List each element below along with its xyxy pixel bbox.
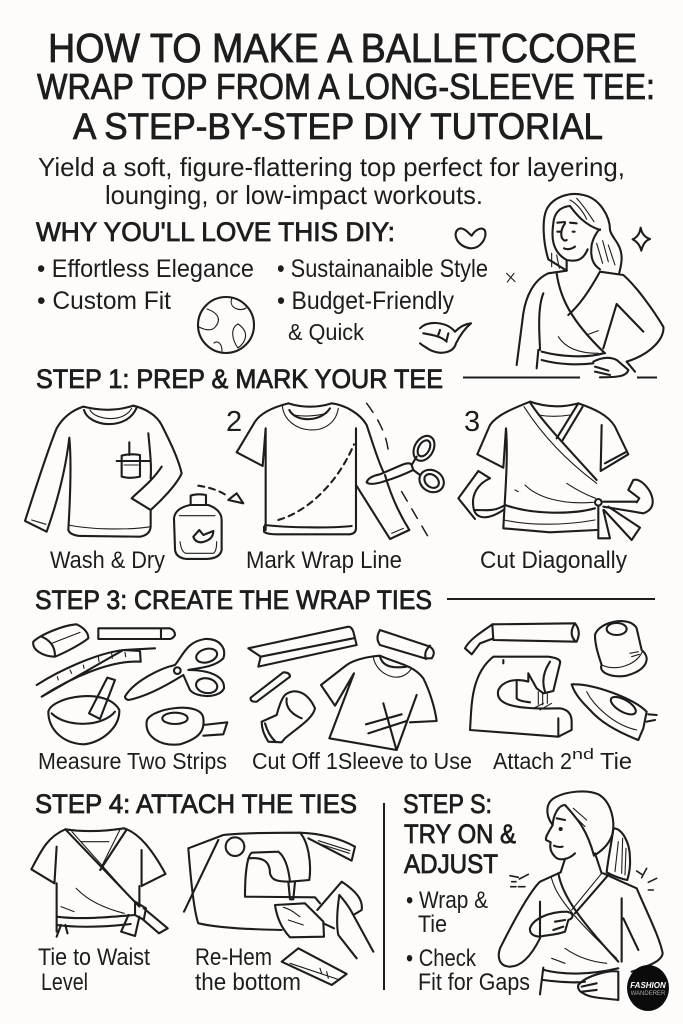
thread spool	[595, 621, 647, 676]
step 3 captions: Measure Two Strips	[38, 748, 227, 774]
panel: step 3 tools	[33, 624, 227, 745]
subtitle: Yield a soft, figure-flattering top perfect for layering,	[38, 152, 625, 182]
heading: step 1: STEP 1: PREP & MARK YOUR TEE	[36, 364, 443, 394]
sewing machine	[470, 657, 572, 737]
benefits list: & Quick	[288, 319, 364, 345]
panel: step 4 sewing machine	[184, 833, 373, 985]
benefits list: • Budget-Friendly	[277, 287, 454, 315]
step 4 captions: Tie to Waist	[38, 944, 150, 971]
benefits list: • Sustainanaible Style	[277, 255, 488, 283]
detergent bottle	[174, 494, 222, 559]
panel: step 3 machine and iron	[465, 621, 657, 740]
icon: leaf	[420, 323, 471, 353]
label: step numeral 2: 2	[226, 406, 242, 438]
fabric strip fold	[248, 627, 357, 667]
step 4 captions: Re-Hem	[195, 944, 272, 971]
heading: step 3: STEP 3: CREATE THE WRAP TIES	[35, 585, 432, 615]
large scissors	[125, 639, 224, 700]
icon: sparkle	[633, 228, 650, 251]
icon: globe	[198, 297, 254, 353]
heading: step 4: STEP 4: ATTACH THE TIES	[35, 789, 357, 819]
icon: small cross	[507, 273, 515, 282]
step 3 captions: Attach 2	[493, 748, 572, 774]
machine	[184, 833, 355, 930]
step 1 captions	[50, 547, 627, 574]
step 5 list: • Check	[406, 945, 477, 972]
heading: step 5	[403, 789, 516, 879]
illustration: woman adjusting wrap top	[499, 791, 663, 1000]
icon: heart	[456, 228, 485, 248]
step 5 list: Tie	[418, 911, 447, 938]
strip with frayed end	[465, 623, 579, 654]
scissors	[367, 432, 448, 497]
panel: step 1, wrap top with ties	[458, 402, 653, 540]
fabric roll and strip	[33, 624, 175, 657]
cut line	[367, 403, 430, 540]
torso	[499, 872, 663, 1000]
title: HOW TO MAKE A BALLETCCORE	[48, 25, 637, 71]
panel: step 1, long-sleeve tee and bottle	[25, 406, 228, 559]
bowl and spatula	[48, 678, 119, 744]
measuring tape	[37, 648, 155, 697]
step 3 captions	[38, 746, 632, 774]
step 5 list: Fit for Gaps	[418, 969, 530, 996]
step 1 captions: Wash & Dry	[50, 547, 165, 574]
head and ponytail	[546, 791, 630, 880]
arrow: bottle to tee	[198, 486, 228, 497]
step 1 captions: Cut Diagonally	[480, 547, 627, 574]
benefits list: • Custom Fit	[37, 287, 171, 315]
title	[37, 25, 655, 147]
subtitle: lounging, or low-impact workouts.	[105, 180, 483, 210]
panel: step 3 sleeve and tee	[248, 627, 437, 750]
divider	[383, 803, 385, 990]
step 1 captions: Mark Wrap Line	[246, 547, 402, 574]
badge: fashion wanderer: FASHION	[630, 981, 666, 990]
step 5 list	[406, 887, 530, 996]
panel: step 4 tied wrap top	[31, 828, 168, 937]
step 3 captions: Tie	[600, 748, 632, 774]
step 4 captions: Level	[41, 969, 88, 996]
title: A STEP-BY-STEP DIY TUTORIAL	[73, 106, 603, 147]
cut-off sleeve	[262, 691, 315, 742]
small strip	[251, 672, 290, 702]
fabric under needle	[275, 903, 324, 937]
folded strip	[282, 948, 347, 985]
cut tee	[321, 656, 437, 750]
benefits list	[37, 255, 488, 345]
badge: fashion wanderer	[627, 965, 669, 1011]
motion marks right	[637, 868, 657, 890]
step 5 list: • Wrap &	[406, 887, 488, 914]
heading: step 5: TRY ON &	[404, 819, 516, 849]
step 4 captions: the bottom	[195, 969, 301, 996]
iron	[572, 684, 657, 740]
step 3 captions: nd	[572, 746, 594, 763]
tape roll	[147, 708, 227, 745]
benefits list: • Effortless Elegance	[37, 255, 254, 283]
woman figure	[517, 194, 663, 377]
step 3 captions: Cut Off 1Sleeve to Use	[252, 748, 472, 774]
arrow head	[228, 493, 243, 503]
hand with fabric	[317, 882, 373, 958]
heading: step 5: STEP S:	[403, 789, 492, 819]
panel: step 1, marked tee and scissors	[228, 403, 448, 540]
sleeve strip	[377, 630, 434, 659]
heading: step 5: ADJUST	[404, 849, 498, 879]
step 4 captions	[38, 944, 301, 996]
motion marks left	[510, 874, 528, 887]
illustration: woman in wrap top with heart, leaf and sparkle	[420, 194, 663, 377]
badge: fashion wanderer: WANDERER	[631, 991, 666, 997]
heading: why you'll love this: WHY YOU'LL LOVE THIS DIY:	[36, 217, 395, 247]
marked tee	[237, 403, 409, 539]
label: step numeral 3: 3	[464, 406, 480, 438]
long-sleeve tee with pocket	[25, 406, 182, 537]
subtitle	[38, 152, 625, 210]
